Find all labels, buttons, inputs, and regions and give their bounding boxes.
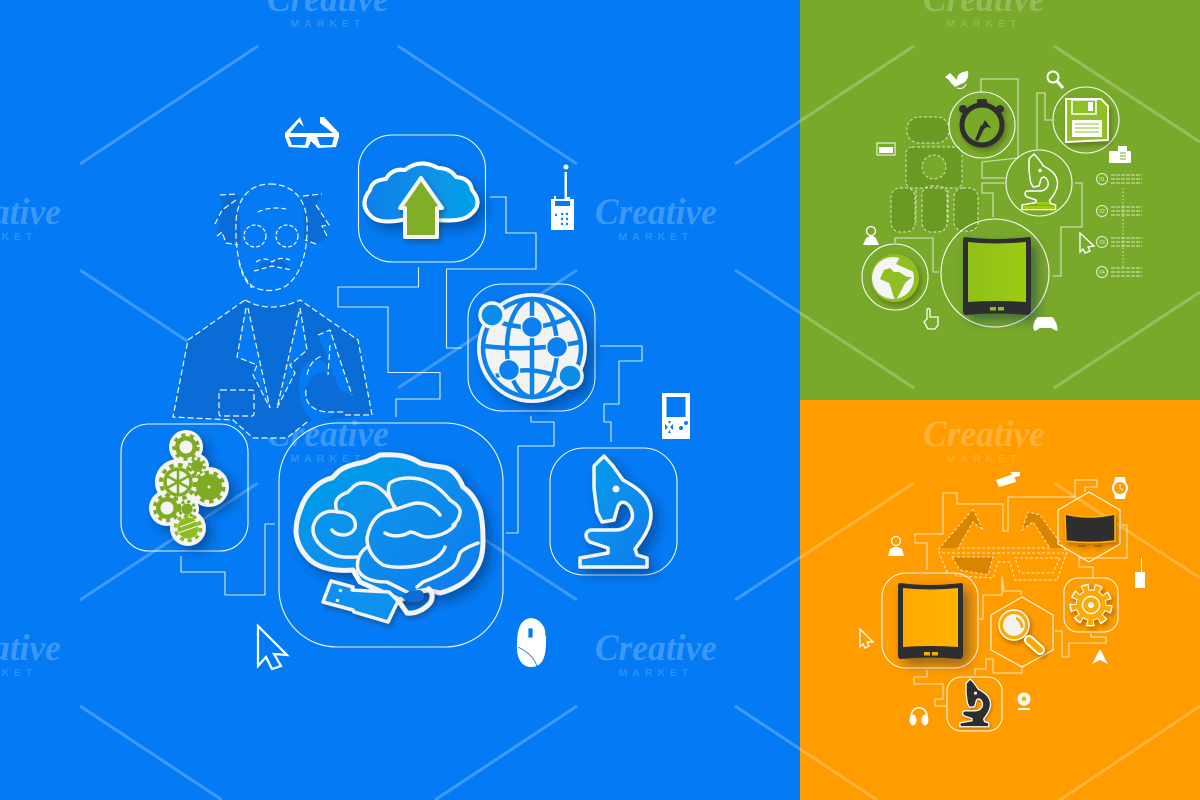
connector lines: green panel	[895, 79, 1082, 276]
watermarks	[0, 0, 1045, 679]
icon: plug and leaf	[945, 71, 968, 88]
watermarks: Creative	[595, 628, 717, 669]
icon: magnifier	[1048, 72, 1063, 88]
panel: brain with usb	[279, 423, 503, 647]
icon: brain	[296, 455, 483, 600]
green panel group	[862, 71, 1142, 331]
list item 04: 04	[1099, 270, 1105, 276]
icon: cursor arrow	[258, 626, 287, 669]
icon: gears	[149, 430, 229, 546]
icon: usb plug	[323, 581, 432, 622]
icon: microscope	[580, 456, 651, 567]
panel: globe network	[468, 284, 595, 411]
dashed person shape	[891, 117, 978, 232]
icon: cloud	[364, 163, 478, 221]
icon: globe	[477, 293, 587, 403]
person figure: scientist	[173, 184, 372, 438]
icon: cursor	[860, 629, 873, 648]
icon: gear	[1074, 588, 1108, 622]
icon: microscope	[960, 679, 991, 727]
icon: tablet	[963, 237, 1031, 315]
connector lines: blue panel	[181, 197, 642, 595]
tablet circle	[941, 219, 1049, 327]
watermarks: MARKET	[619, 231, 693, 243]
icon: navigation arrow	[1092, 649, 1108, 664]
watermarks: MARKET	[947, 18, 1021, 30]
orange panel group	[860, 472, 1145, 731]
icon: walkie talkie	[551, 164, 574, 230]
hexagon box with magnifier	[991, 597, 1053, 667]
info list	[1096, 174, 1142, 278]
watermarks: MARKET	[291, 453, 365, 465]
gear box	[1064, 578, 1118, 632]
icon: microscope	[1022, 154, 1058, 210]
icon: floppy disk	[1066, 99, 1108, 142]
icon: curved monitor	[1065, 514, 1115, 546]
microscope circle	[1006, 150, 1072, 216]
list item 02: 02	[1099, 209, 1105, 215]
icon: 3d glasses	[285, 117, 339, 148]
watermarks: MARKET	[947, 453, 1021, 465]
icon: person	[888, 536, 904, 556]
icon: computer mouse	[516, 618, 546, 667]
list item 03: 03	[1099, 240, 1105, 246]
watermarks: MARKET	[619, 667, 693, 679]
list item 01: 01	[1099, 177, 1105, 183]
icon: upload arrow	[400, 178, 442, 237]
connector lines: orange panel	[914, 480, 1127, 706]
icon: pointing hand	[924, 308, 938, 329]
watermarks: Creative	[923, 414, 1045, 455]
watermarks: Creative	[267, 414, 389, 455]
panel: blue background	[0, 0, 800, 800]
earth circle	[862, 244, 928, 310]
tablet box	[882, 573, 978, 668]
icon: webcam	[1018, 692, 1030, 709]
panel: cloud upload	[358, 135, 486, 262]
icon: person	[863, 226, 879, 245]
icon: game controller	[1033, 317, 1058, 331]
icon: fax machine	[1109, 146, 1131, 163]
icon: magnifier	[999, 610, 1040, 650]
panel: gears	[121, 424, 248, 551]
icon: tablet	[898, 583, 963, 659]
panel: orange background	[800, 400, 1200, 800]
icon: stopwatch	[959, 99, 1004, 145]
microscope box	[947, 677, 1002, 731]
watermarks: MARKET	[291, 18, 365, 30]
panel: microscope	[550, 448, 677, 575]
stopwatch circle	[949, 92, 1015, 158]
icon: wristwatch	[1113, 477, 1127, 499]
hexagon box with curved screen	[1058, 492, 1120, 562]
floppy disk circle	[1053, 87, 1119, 153]
icon: cursor	[1080, 233, 1094, 253]
panel: green background	[800, 0, 1200, 400]
icon: walkie talkie	[1135, 558, 1145, 588]
dashed 3d glasses shape	[938, 509, 1067, 580]
icon: security camera	[996, 472, 1020, 487]
watermarks: Creative	[595, 192, 717, 233]
icon: chart card	[877, 143, 895, 155]
icon: handheld game	[662, 393, 690, 439]
icon: earth globe	[871, 254, 919, 302]
icon: headphones	[910, 708, 928, 726]
